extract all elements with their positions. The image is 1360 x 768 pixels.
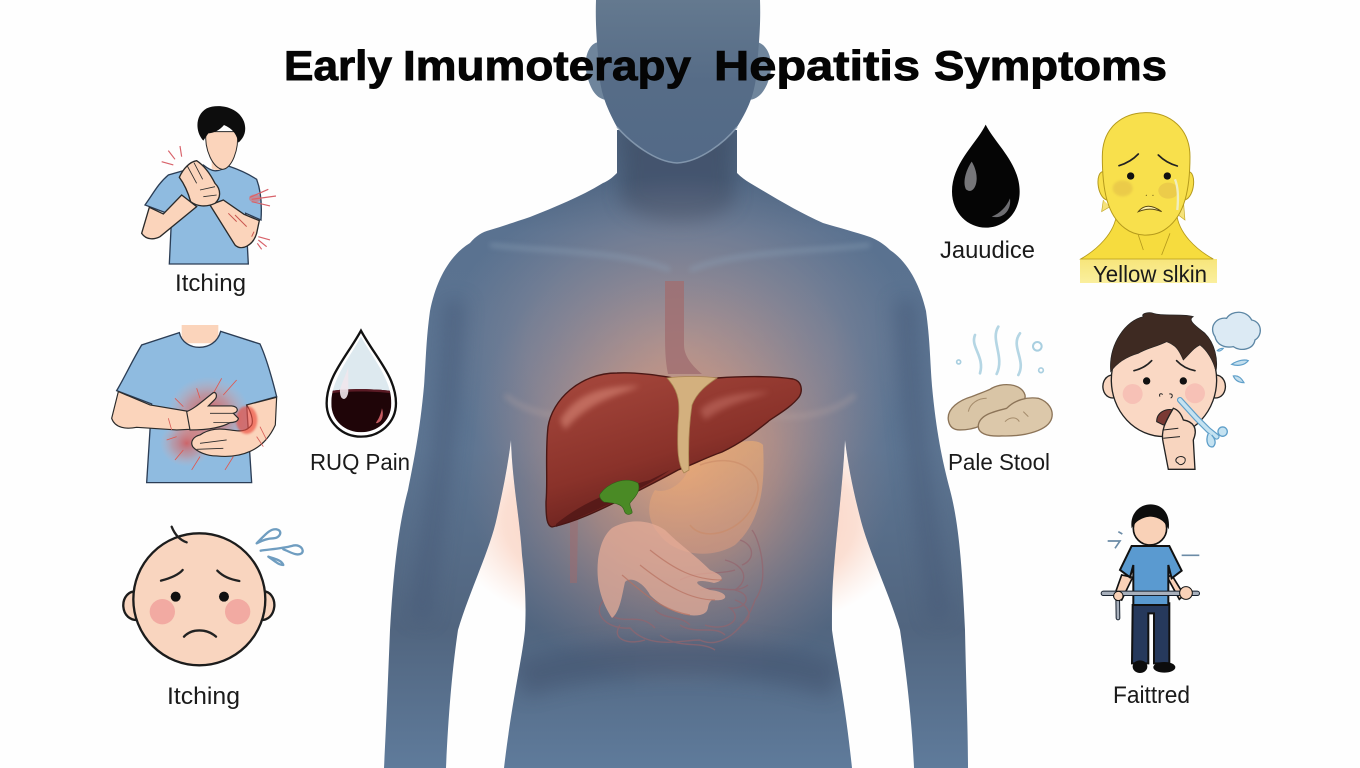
ear right <box>748 42 771 100</box>
internal organs <box>546 281 801 650</box>
symptom: jaundice drop <box>940 125 1035 264</box>
symptom: yellow skin face <box>1080 113 1217 287</box>
label: Yellow slkin <box>1093 261 1207 287</box>
title: Imumoterapy <box>403 42 692 89</box>
torso and arms silhouette <box>384 130 968 768</box>
hand overlay <box>598 521 725 618</box>
symptom: fatigued figure <box>1103 504 1199 709</box>
gallbladder <box>600 480 639 514</box>
label: Jauudice <box>940 237 1035 264</box>
icon: black drop <box>952 125 1020 228</box>
title: Early <box>284 42 393 89</box>
symptom: pale stool <box>948 327 1052 475</box>
icon: blood drop <box>327 330 397 440</box>
icon: person scratching arm <box>142 106 276 264</box>
head <box>596 0 760 163</box>
label: Pale Stool <box>948 449 1050 475</box>
highlight band <box>1080 259 1217 283</box>
icon: hand and spray <box>1162 400 1227 469</box>
symptom: sad face itching <box>123 527 303 710</box>
central body figure <box>384 0 968 768</box>
label: Itching <box>167 683 240 710</box>
icon: thought cloud <box>1213 312 1260 349</box>
jaw highlight <box>617 127 737 163</box>
icon: yellow face <box>1081 113 1213 259</box>
left tube <box>570 515 578 583</box>
icon: torso holding abdomen <box>112 325 277 483</box>
label: Faittred <box>1113 682 1190 709</box>
liver <box>546 373 801 527</box>
title: Hepatitis <box>714 42 920 89</box>
esophagus <box>665 281 702 374</box>
symptom: coughing boy <box>1103 312 1260 469</box>
icon: boy face <box>1103 313 1225 437</box>
icon: sweat drops <box>1217 348 1248 383</box>
label: RUQ Pain <box>310 449 410 475</box>
intestines <box>599 530 763 650</box>
label: Itching <box>175 270 246 297</box>
symptom: RUQ pain person <box>112 325 410 483</box>
title: Symptoms <box>934 42 1167 89</box>
icon: sad face <box>123 527 303 665</box>
falciform ligament <box>667 376 717 473</box>
symptom: itching person <box>142 106 276 297</box>
icon: stool with steam <box>948 327 1052 436</box>
icon: standing person with bar <box>1103 504 1199 673</box>
stomach <box>649 441 764 554</box>
ear left <box>586 42 608 100</box>
